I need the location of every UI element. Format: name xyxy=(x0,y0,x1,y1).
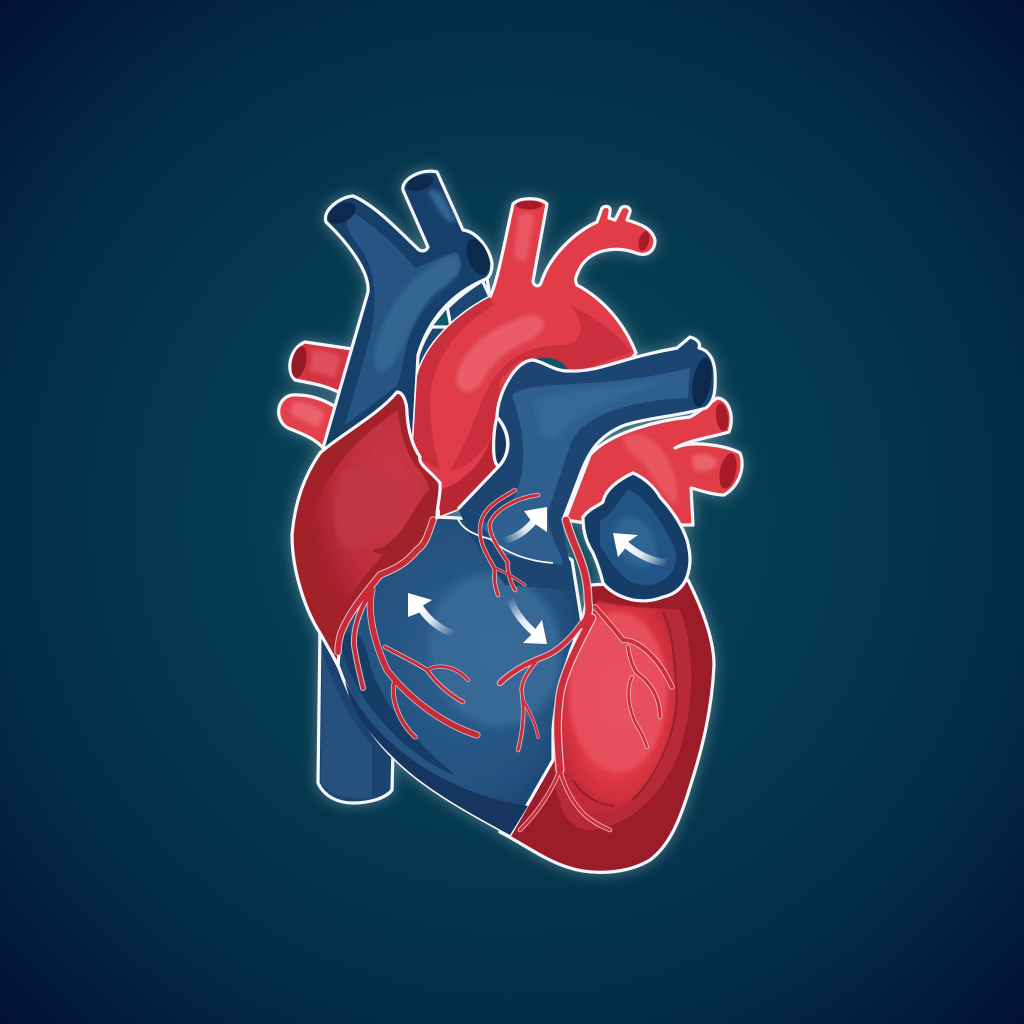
vena cava highlight xyxy=(374,256,459,372)
ventricle inner xyxy=(558,602,676,812)
arrow: centre down xyxy=(510,598,547,644)
right coronary branches xyxy=(500,520,672,830)
atrium body xyxy=(312,410,431,625)
trunk crease xyxy=(457,517,553,563)
trunk light area xyxy=(480,368,690,565)
atrium scallop shadow xyxy=(372,490,433,554)
artery highlight xyxy=(624,434,677,505)
arrow: centre up xyxy=(503,507,547,541)
left ventricle blue xyxy=(338,517,583,835)
inferior vena cava xyxy=(318,630,393,803)
artery branch highlight xyxy=(692,454,717,471)
trunk outline xyxy=(458,337,715,520)
trunk opening xyxy=(689,356,715,408)
right atrium xyxy=(292,392,440,665)
heart xyxy=(279,171,742,872)
coronary vessels xyxy=(338,490,672,830)
left atrium xyxy=(583,473,690,601)
aorta branch highlight xyxy=(514,212,534,262)
atrium highlight xyxy=(615,516,657,568)
arrow: upper left xyxy=(408,593,453,634)
ventricle highlight xyxy=(569,612,667,772)
trunk highlight xyxy=(535,378,670,440)
arch branch opening xyxy=(637,230,651,252)
ventricle mid band xyxy=(553,600,691,830)
pulmonary artery trunk xyxy=(457,337,715,590)
vessel white edges xyxy=(338,490,672,830)
central coronary branches xyxy=(480,490,538,595)
artery openings xyxy=(714,402,740,490)
arch gap xyxy=(533,358,568,370)
upper vein opening xyxy=(289,345,309,379)
upper left vein xyxy=(289,342,352,393)
ventricle centre light xyxy=(407,552,583,748)
ventricle shadow xyxy=(345,680,528,835)
aorta opening xyxy=(516,200,542,210)
trunk fill xyxy=(458,337,715,590)
pulmonary veins left xyxy=(279,342,352,449)
left dark band xyxy=(340,632,455,775)
right pulmonary arteries xyxy=(565,398,742,525)
vena cava openings xyxy=(325,172,494,278)
left coronary branches xyxy=(338,520,477,737)
aorta left dark edge xyxy=(413,297,494,470)
lower left vein xyxy=(279,395,337,449)
aorta arch dark band xyxy=(450,305,632,470)
aorta highlight xyxy=(457,315,544,392)
arrow: left atrium xyxy=(613,533,667,563)
aorta lens xyxy=(494,417,508,465)
atrium highlight xyxy=(335,466,412,549)
aorta dark lower edge xyxy=(440,417,507,516)
superior vena cava xyxy=(323,171,494,450)
connecting vessels between vena cava and aorta xyxy=(415,278,490,377)
vena cava light band xyxy=(345,212,461,425)
ventricle creases xyxy=(559,612,677,830)
atrium inner xyxy=(600,490,676,585)
flow arrows xyxy=(408,507,667,644)
upper branch highlight xyxy=(428,190,456,222)
aorta xyxy=(413,199,655,516)
right ventricle red xyxy=(500,580,714,872)
